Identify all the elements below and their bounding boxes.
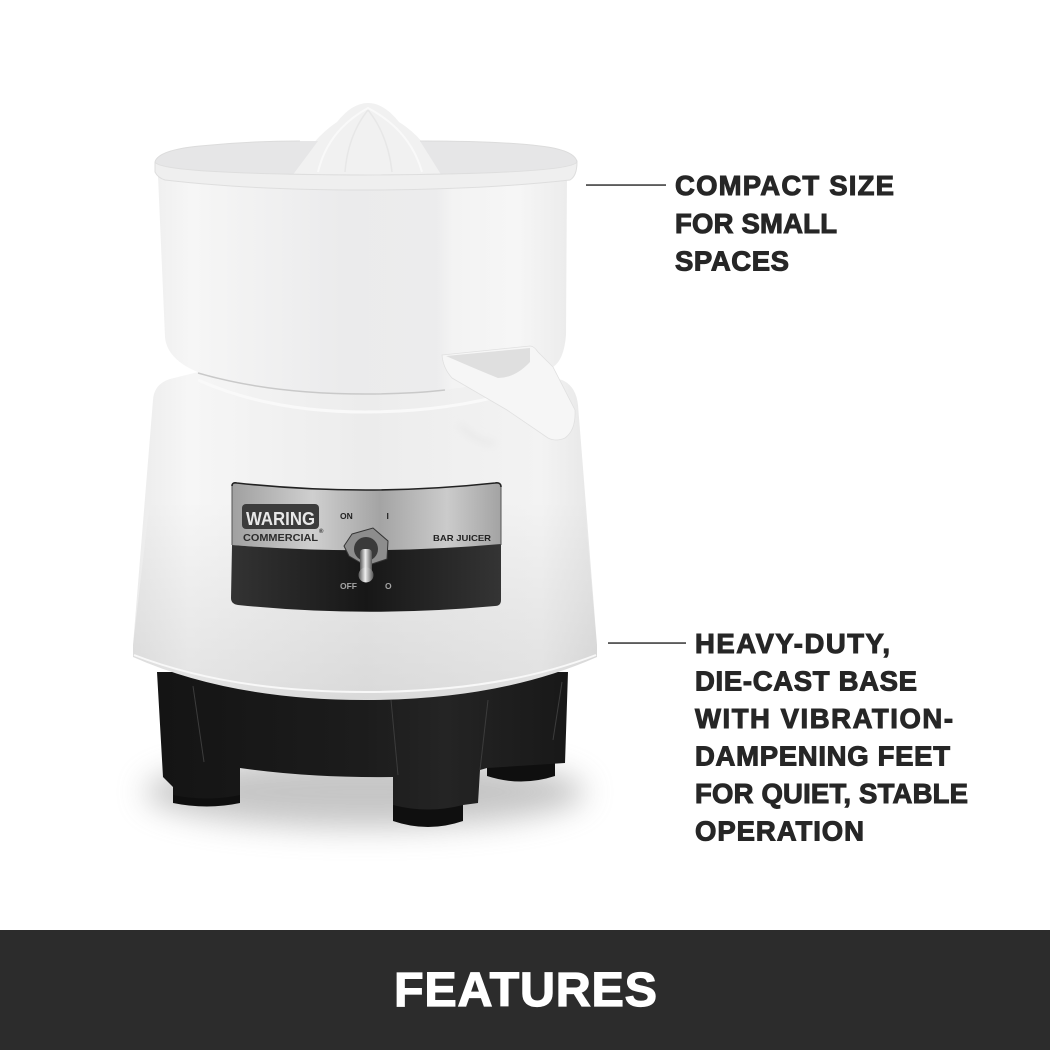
callout line: compact size [586,184,666,186]
pour spout [442,346,575,440]
white housing [133,372,597,700]
switch labels: BAR JUICER [433,533,491,543]
switch labels: O [385,581,392,591]
callout text: base [695,628,968,846]
brand logo: COMMERCIAL [243,532,319,544]
juicer bowl [155,141,577,394]
floor shadow [145,756,585,828]
black base with feet [157,672,568,827]
banner heading: FEATURES [394,963,657,1017]
callout text: compact size: FOR SMALL [675,208,837,239]
toggle switch [344,528,388,582]
callout text: compact size: SPACES [675,246,789,276]
control plate [231,483,501,612]
callout text: base: WITH VIBRATION- [695,703,953,734]
callout text: base: HEAVY-DUTY, [695,628,890,659]
switch labels [340,511,491,591]
callout text: compact size [675,170,894,276]
callout text: compact size: COMPACT SIZE [675,170,894,201]
brand logo: WARING [246,509,315,529]
callout text: base: OPERATION [695,816,864,846]
callout text: base: FOR QUIET, STABLE [695,778,968,809]
switch labels: I [386,511,389,521]
switch labels: ON [340,511,353,521]
callout line: base [608,642,686,644]
callout text: base: DIE-CAST BASE [695,666,917,696]
footer banner [0,930,1050,1050]
brand logo: ® [319,528,324,535]
brand logo [242,504,324,544]
juicer product illustration [133,103,597,827]
callout text: base: DAMPENING FEET [695,740,950,772]
switch labels: OFF [340,581,357,591]
citrus reamer cone [292,103,442,176]
